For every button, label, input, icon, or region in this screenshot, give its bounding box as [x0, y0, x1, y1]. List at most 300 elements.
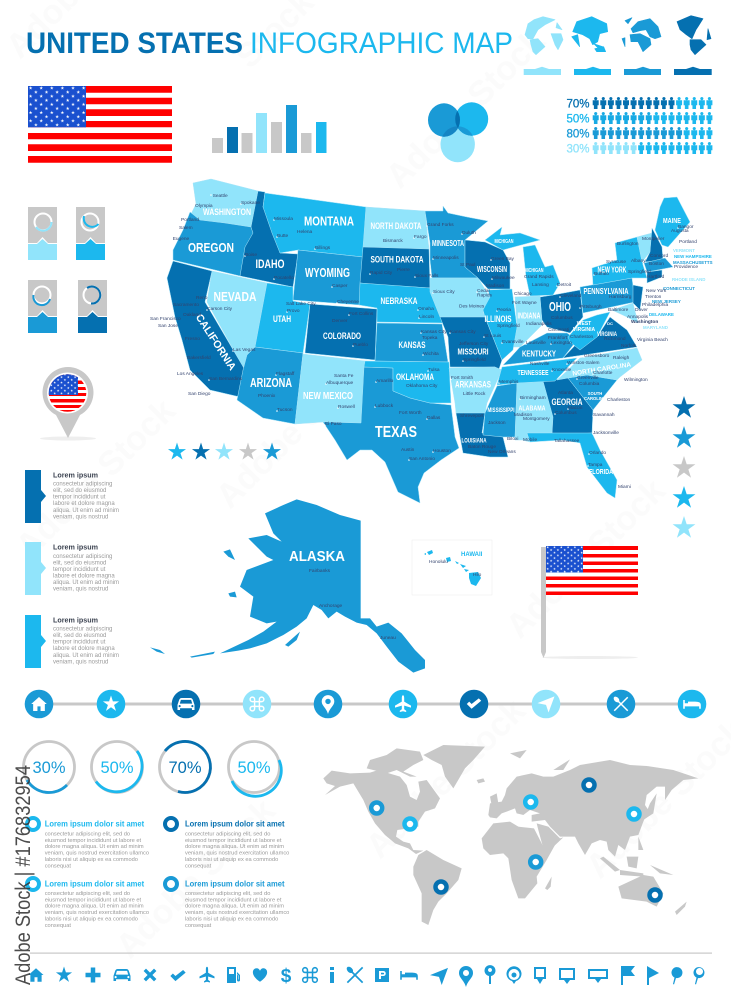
city labels: Springfield [497, 323, 520, 329]
city labels: San Jose [158, 323, 178, 329]
city labels: Seattle [213, 193, 228, 199]
city labels: San Diego [188, 391, 211, 397]
city labels: Nashville [530, 361, 550, 367]
city labels: Mobile [523, 437, 537, 443]
bullet text 3: laboris nisi ut aliquip ex ea commodo [45, 916, 138, 922]
city labels: St Louis [484, 333, 502, 339]
city labels: Buffalo [594, 271, 609, 277]
text block 1: veniam, quis nostrud [53, 514, 108, 520]
city labels: Duluth [462, 230, 476, 236]
percentage labels [566, 98, 590, 156]
city labels: Portland [679, 239, 697, 245]
city labels: Grand Rapids [524, 274, 554, 280]
icon: plane [389, 690, 417, 718]
city labels: Greenville [577, 375, 599, 381]
state labels: DC [607, 321, 613, 326]
ring 50 percent: 50% [100, 759, 134, 777]
state labels: NEW YORK [598, 266, 627, 275]
city labels: Reno [196, 295, 208, 301]
Alaska cities: Juneau [380, 635, 396, 641]
state labels: TENNESSEE [518, 368, 548, 377]
city labels: Bismarck [383, 238, 403, 244]
bullet text 4: consequat [185, 923, 212, 929]
bullet text 2: consequat [185, 864, 212, 870]
northeast state labels outside map: MASSACHUSETTS [673, 260, 713, 265]
city labels: Hartford [647, 274, 665, 280]
bullet text 1: consectetur adipiscing elit, sed do [45, 832, 130, 838]
bullet text 2: dolore magna aliqua. Ut enim ad minim [185, 844, 284, 850]
state labels: ALABAMA [518, 406, 546, 413]
title [26, 27, 513, 60]
percentage labels: 80% [566, 128, 590, 140]
city labels [150, 193, 698, 490]
city labels: Fargo [414, 234, 427, 240]
title: INFOGRAPHIC MAP [250, 27, 513, 60]
state labels: KENTUCKY [522, 349, 556, 359]
city labels: Syracuse [606, 259, 626, 265]
city labels: Trenton [645, 294, 662, 300]
map: contiguous United States [150, 179, 713, 503]
city labels: El Paso [325, 421, 342, 427]
state labels: MINNESOTA [432, 239, 464, 248]
state labels: NEBRASKA [380, 296, 418, 306]
city labels: Miami [618, 484, 631, 490]
Alaska cities [309, 568, 396, 641]
bullet text 3: eiusmod tempor incididunt ut labore et [45, 897, 142, 903]
globe: Americas light [525, 17, 563, 55]
city labels: San Francisco [150, 316, 181, 322]
city labels: Spokane [241, 200, 260, 206]
city labels: Amarillo [376, 378, 394, 384]
text block 3: Lorem ipsum [53, 616, 98, 624]
state labels: VIRGINIA [597, 332, 617, 338]
bullet text 1: laboris nisi ut aliquip ex ea commodo [45, 857, 138, 863]
city labels: Lubbock [375, 403, 394, 409]
city labels: Carson City [207, 306, 233, 312]
icon: dollar: $ [281, 966, 292, 987]
city labels: Concord [650, 253, 668, 259]
city labels: Washington [631, 319, 658, 325]
city labels: Pueblo [353, 342, 368, 348]
text block 3: elit, sed do eiusmod [53, 633, 106, 639]
state labels: COLORADO [323, 331, 361, 341]
Alaska cities: Anchorage [319, 603, 343, 609]
city labels: Omaha [418, 306, 434, 312]
state labels: FLORIDA [589, 467, 613, 476]
city labels: Virginia Beach [637, 337, 668, 343]
city labels: Springfield [463, 357, 486, 363]
state labels: MAINE [663, 216, 681, 225]
city labels: Las Vegas [233, 347, 256, 353]
text block 2 [25, 542, 119, 595]
bullet text 4: veniam, quis nostrud exercitation ullamco [185, 910, 289, 916]
city labels: Columbus [555, 410, 577, 416]
state labels: CAROLINA [584, 396, 606, 401]
state labels: NORTH DAKOTA [370, 221, 422, 231]
map pin with flag [40, 367, 96, 440]
city labels: Columbus [551, 315, 573, 321]
text block 1: tempor incididunt ut [53, 494, 106, 500]
inset: Hawaii: Hilo [473, 572, 482, 578]
rating stars [168, 442, 281, 460]
city labels: Green Bay [491, 256, 515, 262]
text block 3: labore et dolore magna [53, 646, 115, 652]
timeline with icons [25, 690, 706, 718]
city labels: Lansing [532, 282, 549, 288]
bullet text 2: Lorem ipsum dolor sit amet [185, 820, 285, 829]
city labels: Memphis [499, 379, 519, 385]
city labels: Fort Wayne [512, 300, 537, 306]
city labels: Austin [401, 447, 415, 453]
city labels: Charlotte [593, 370, 613, 376]
globe: Asia cyan [572, 17, 608, 52]
city labels: Norfolk [621, 343, 637, 349]
state labels: IDAHO [256, 257, 284, 271]
city labels: San Bernardino [209, 376, 243, 382]
icon: target pin [506, 966, 522, 984]
icon: star [56, 966, 72, 982]
text block 2: Lorem ipsum [53, 542, 98, 552]
city labels: Annapolis [627, 314, 649, 320]
city labels: Chicago [514, 291, 532, 297]
flag on stick [541, 546, 638, 659]
text block 1: Lorem ipsum [53, 470, 98, 480]
inset: Hawaii: HAWAII [461, 552, 483, 558]
city labels: Sioux City [433, 289, 455, 295]
city labels: Detroit [557, 282, 572, 288]
ribbon widget dark [78, 280, 107, 333]
city labels: Fort Worth [399, 410, 422, 416]
state labels: WEST [577, 321, 591, 327]
bullet text 3 [27, 878, 149, 929]
state labels: WYOMING [305, 266, 350, 280]
icon: speech bubble [559, 968, 575, 984]
bar chart [212, 105, 326, 153]
city labels: Winston-Salem [567, 360, 600, 366]
city labels: Burlington [617, 241, 639, 247]
city labels: Milwaukee [492, 275, 515, 281]
state labels: SOUTH DAKOTA [370, 255, 424, 265]
city labels: Baltimore [608, 307, 629, 313]
city labels: Kansas City [421, 329, 447, 335]
city labels: Dover [635, 307, 648, 313]
icon strip [28, 952, 712, 987]
globe: Americas dark [677, 16, 711, 55]
city labels: Salt Lake City [286, 301, 316, 307]
ring 30 percent: 30% [32, 759, 66, 777]
icon: bed [400, 971, 418, 980]
city labels: Salem [179, 225, 193, 231]
state labels: MISSISSIPPI [488, 408, 515, 414]
city labels: Cincinnati [548, 327, 569, 333]
city labels: Provo [287, 308, 300, 314]
icon: round pin [671, 967, 682, 984]
city labels: Augusta [671, 228, 689, 234]
city labels: Philadelphia [642, 302, 668, 308]
city labels: Denver [332, 318, 348, 324]
Alaska cities: Fairbanks [309, 568, 331, 574]
ring 50 percent second: 50% [237, 759, 271, 777]
city labels: Tulsa [428, 367, 440, 373]
ribbon widget light [28, 207, 57, 260]
percent ring charts [24, 741, 281, 796]
city labels: New York [646, 288, 667, 294]
state labels: NEVADA [214, 289, 257, 304]
city labels: Tampa [588, 462, 603, 468]
bullet text 2: eiusmod tempor incididunt ut labore et [185, 838, 282, 844]
city labels: Lexington [551, 340, 572, 346]
text block 2: tempor incididunt ut [53, 567, 106, 573]
city labels: Orlando [589, 450, 606, 456]
state labels: WISCONSIN [477, 265, 507, 274]
watermark: Adobe Stock [109, 792, 283, 966]
icon: star [97, 690, 125, 718]
city labels: Evansville [502, 339, 524, 345]
northeast state labels outside map: CONNECTICUT [663, 286, 695, 291]
state labels: GEORGIA [552, 397, 583, 408]
city labels: Raleigh [613, 355, 630, 361]
city labels: Louisville [526, 340, 546, 346]
state labels: MICHIGAN [494, 239, 514, 245]
ribbon widget cyan [76, 207, 105, 260]
city labels: Peoria [497, 307, 511, 313]
icon: info [330, 967, 334, 983]
text block 1: aliqua. Ut enim ad minim [53, 508, 119, 514]
map: Alaska [150, 499, 425, 673]
people row 80 [593, 127, 712, 139]
side stars [673, 396, 695, 538]
flag: United States large [28, 86, 172, 163]
watermark: Adobe Stock [499, 472, 673, 646]
text block 2: elit, sed do eiusmod [53, 560, 106, 566]
state shapes [167, 179, 690, 503]
city labels: Jacksonville [593, 430, 619, 436]
bullet text 2 [165, 818, 289, 870]
city labels: Lincoln [419, 314, 435, 320]
city labels: Fresno [185, 336, 200, 342]
city labels: Madison [514, 412, 532, 418]
bullet text 3: Lorem ipsum dolor sit amet [45, 880, 144, 888]
northeast state labels outside map: NEW JERSEY [652, 299, 681, 304]
text block 3: veniam, quis nostrud [53, 660, 108, 666]
globe base bars [524, 67, 712, 75]
text block 2: labore et dolore magna [53, 574, 115, 580]
bullet text 1: Lorem ipsum dolor sit amet [45, 820, 144, 829]
city labels: Oklahoma City [406, 383, 438, 389]
state labels: TEXAS [375, 424, 417, 441]
city labels: Rapids [477, 292, 493, 298]
inset: Hawaii: Honolulu [429, 559, 448, 565]
bullet text 1: dolore magna aliqua. Ut enim ad minim [45, 844, 144, 850]
icon: car [114, 969, 130, 981]
city labels: Eugene [173, 236, 190, 242]
city labels: Knoxville [552, 367, 572, 373]
city labels: Indianapolis [526, 321, 552, 327]
city labels: Missoula [274, 216, 293, 222]
northeast state labels outside map: MARYLAND [643, 325, 668, 330]
city labels: Houston [433, 448, 451, 454]
icon: plus [86, 968, 100, 982]
city labels: Sioux Falls [415, 273, 439, 279]
state labels: NORTH CAROLINA [572, 361, 632, 378]
city labels: Roswell [338, 404, 355, 410]
city labels: Sacramento [173, 302, 199, 308]
bullet text 2: laboris nisi ut aliquip ex ea commodo [185, 857, 278, 863]
icon: check [460, 690, 488, 718]
city labels: Tallahassee [554, 438, 580, 444]
city labels: Cheyenne [337, 299, 359, 305]
icon: check [170, 970, 186, 981]
city labels: Birmingham [520, 395, 546, 401]
state labels: MONTANA [304, 214, 354, 228]
state labels [188, 207, 681, 476]
state labels: ARKANSAS [455, 380, 491, 390]
bullet text 3: consectetur adipiscing elit, sed do [45, 891, 130, 897]
city labels: Boise [245, 252, 257, 258]
icon: cross [144, 969, 156, 981]
state labels: OKLAHOMA [396, 372, 434, 383]
state labels: ARIZONA [250, 376, 292, 390]
bullet text 1: consequat [45, 864, 71, 870]
city labels: Shreveport [460, 413, 484, 419]
ring 70 percent: 70% [168, 759, 202, 777]
city labels: Albuquerque [326, 380, 354, 386]
city labels: Minneapolis [433, 255, 459, 261]
world map [323, 745, 698, 925]
watermark: Adobe Stock [209, 342, 383, 516]
city labels: Frankfort [548, 335, 568, 341]
icon: command [243, 690, 271, 718]
city labels: New Orleans [488, 449, 516, 455]
text block 3: aliqua. Ut enim ad minim [53, 653, 119, 659]
icon: home [28, 968, 44, 982]
city labels: Des Moines [459, 304, 485, 310]
Alaska label: ALASKA [289, 548, 345, 565]
state labels: INDIANA [518, 312, 541, 321]
state labels: PENNSYLVANIA [584, 286, 628, 296]
city labels: Pittsburgh [580, 304, 602, 310]
text block 2: aliqua. Ut enim ad minim [53, 580, 119, 586]
city labels: Charleston [607, 397, 631, 403]
bullet text 4: eiusmod tempor incididunt ut labore et [185, 897, 282, 903]
city labels: Flagstaff [276, 371, 295, 377]
bullet text 3: dolore magna aliqua. Ut enim ad minim [45, 904, 144, 910]
percentage labels: 50% [566, 114, 590, 126]
bullet text 1: veniam, quis nostrud exercitation ullamco [45, 850, 149, 856]
icon: car [172, 690, 200, 718]
text block 3: tempor incididunt ut [53, 640, 106, 646]
city labels: Baton Rouge [468, 444, 496, 450]
watermark: Adobe Stock [379, 22, 553, 196]
bullet text 3: veniam, quis nostrud exercitation ullamco [45, 910, 149, 916]
people row 50 [593, 112, 712, 124]
globes row [524, 16, 712, 75]
icon: restaurant [607, 690, 635, 718]
percentage labels: 30% [566, 144, 590, 156]
text block 2: veniam, quis nostrud [53, 586, 108, 592]
stock image id text: Adobe Stock | #176832954 [12, 765, 35, 985]
globe: Africa mid blue [622, 18, 661, 52]
city labels: Montpelier [642, 236, 665, 242]
ring 50 percent second [228, 742, 281, 796]
city labels: Boston [649, 261, 664, 267]
city labels: Fort Collins [349, 311, 374, 317]
icon: command [303, 968, 317, 982]
city labels: Dallas [427, 415, 441, 421]
city labels: Kansas City [450, 329, 476, 335]
icon: fuel [227, 967, 240, 983]
inset: Hawaii [412, 540, 492, 595]
icon: navigation arrow [430, 968, 448, 985]
watermark: Adobe Stock [9, 392, 183, 566]
city labels: Little Rock [463, 391, 486, 397]
city labels: Jefferson City [459, 341, 489, 347]
bullet text 2: veniam, quis nostrud exercitation ullamco [185, 850, 289, 856]
state labels: OREGON [188, 240, 234, 255]
city labels: Pierre [397, 267, 410, 273]
city labels: Billings [315, 245, 331, 251]
northeast state labels outside map: NEW HAMPSHIRE [674, 254, 712, 259]
state labels: MICHIGAN [524, 268, 544, 274]
state labels: SOUTH [588, 391, 602, 396]
city labels: Greensboro [584, 353, 610, 359]
city labels: Casper [332, 283, 348, 289]
city labels: Wichita [423, 351, 439, 357]
city labels: Oakland [183, 312, 201, 318]
northeast state labels outside map: RHODE ISLAND [672, 277, 705, 282]
northeast state labels outside map: VERMONT [673, 248, 695, 253]
city labels: Richmond [604, 336, 626, 342]
city labels: Portland [181, 217, 199, 223]
text block 1: labore et dolore magna [53, 501, 115, 507]
ring 70 percent [160, 741, 210, 792]
state labels: VIRGINIA [573, 327, 595, 333]
icon: restaurant [345, 965, 363, 983]
text block 3 [25, 615, 119, 668]
city labels: Pocatello [274, 275, 294, 281]
city labels: Cedar [477, 288, 490, 294]
text block 1: elit, sed do eiusmod [53, 488, 106, 494]
icon: location pin [314, 690, 342, 718]
title: UNITED STATES [26, 27, 243, 60]
state labels: UTAH [273, 314, 291, 324]
bullet text 1 [27, 818, 149, 870]
city labels: Wilmington [624, 377, 648, 383]
city labels: Fort Smith [451, 375, 473, 381]
icon: square marker [534, 967, 546, 984]
northeast state labels outside map: DELAWARE [649, 312, 674, 317]
watermark: Adobe Stock [359, 692, 533, 866]
icon: navigation arrow [532, 690, 560, 718]
state labels: LOUISIANA [462, 439, 487, 445]
venn diagram [428, 102, 488, 162]
city labels: Olympia [195, 203, 213, 209]
bullet text 3: consequat [45, 923, 71, 929]
city labels: Butte [277, 233, 289, 239]
city labels: Phoenix [258, 393, 276, 399]
people row 30 [593, 142, 712, 154]
ribbon ring widgets [28, 207, 107, 333]
icon: wide speech bubble [588, 969, 608, 983]
ribbon widget mid blue [28, 280, 57, 333]
city labels: Springfield [628, 269, 651, 275]
state labels: MISSOURI [458, 347, 488, 357]
city labels: Atlanta [558, 390, 573, 396]
bullet text 1: eiusmod tempor incididunt ut labore et [45, 838, 142, 844]
city labels: Santa Fe [334, 373, 354, 379]
city labels: Los Angeles [177, 371, 204, 377]
people row 70 [593, 97, 712, 109]
